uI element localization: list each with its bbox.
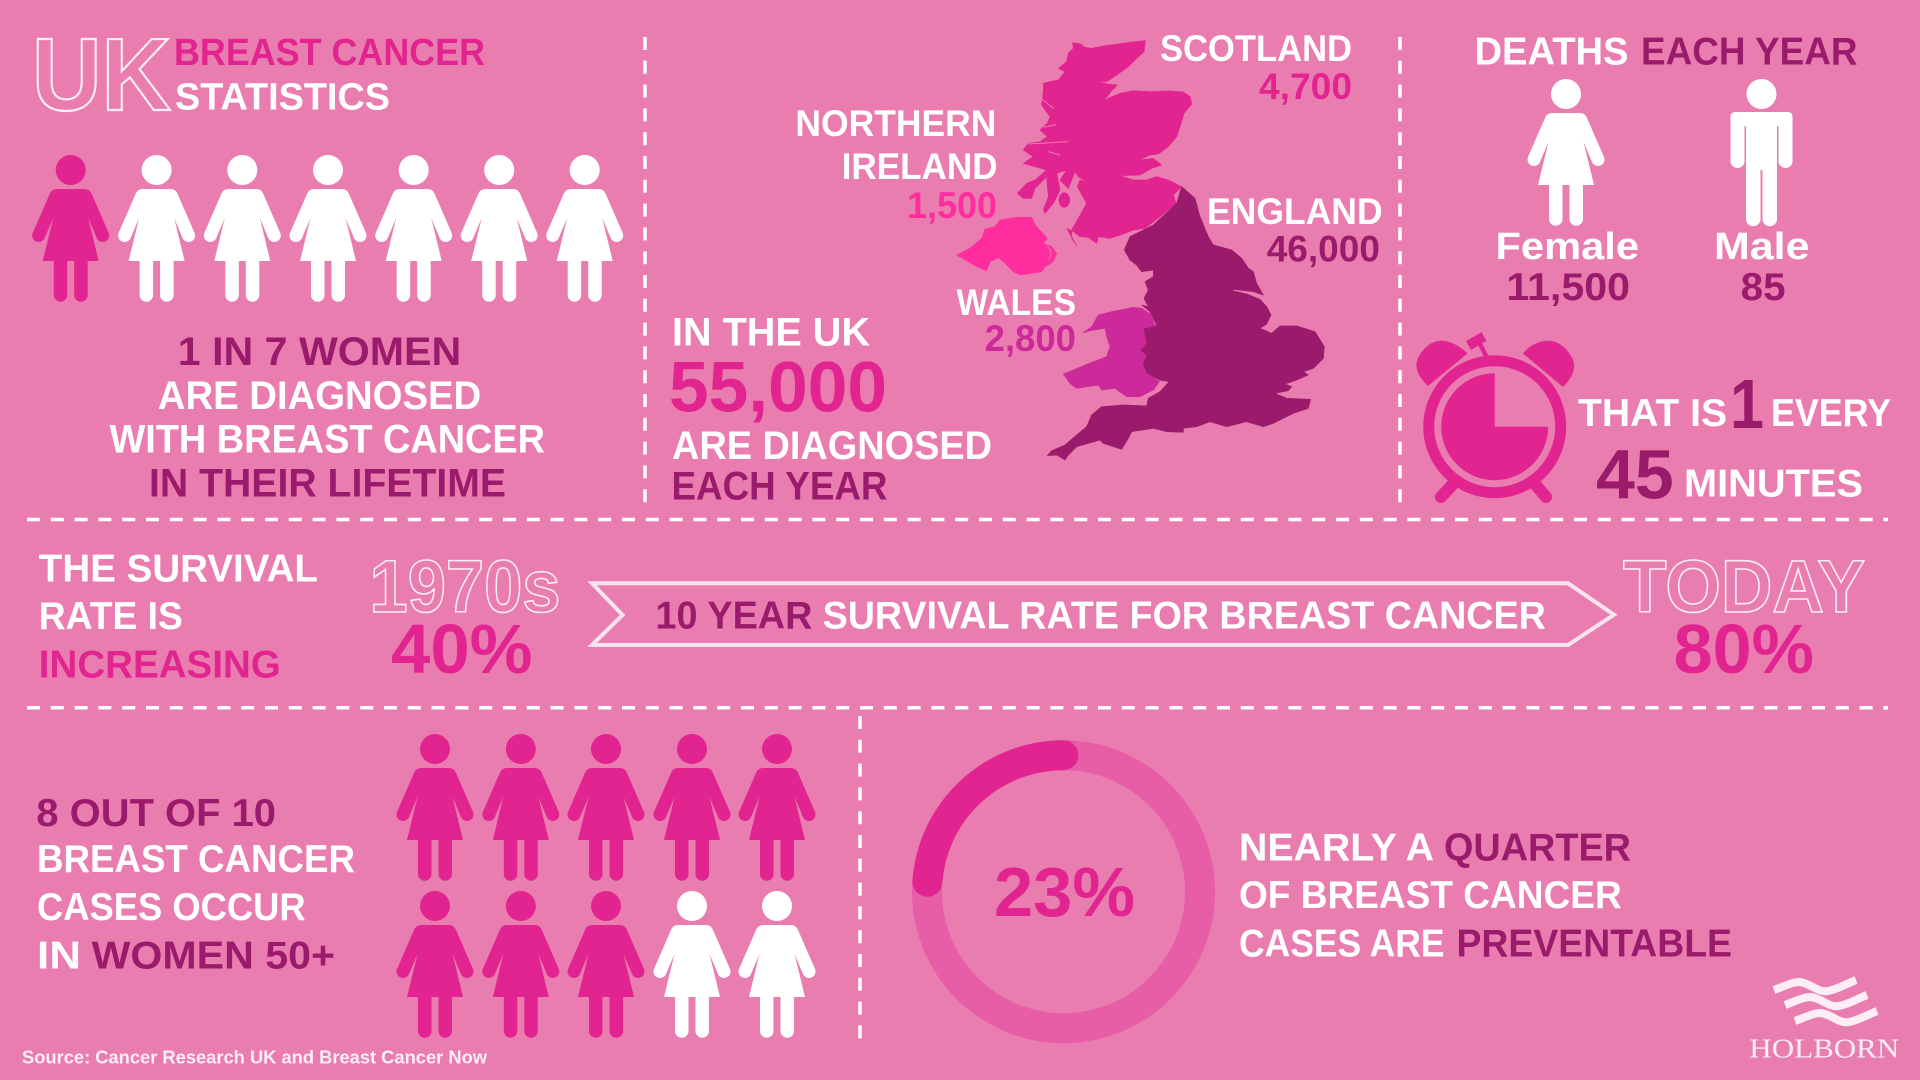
text: nearly a quarter preventable: NEARLY A <box>1239 827 1434 870</box>
label: Scotland: 4,700 <box>1259 66 1352 107</box>
icon: female <box>1528 79 1604 226</box>
map: England <box>1047 187 1324 460</box>
text: 8 out of 10: IN <box>37 934 81 978</box>
pictogram: 8 out of 10 women <box>396 734 816 1038</box>
text: nearly a quarter preventable: QUARTER <box>1444 827 1631 870</box>
text: 55,000 diagnosed each year: IN THE UK <box>672 311 870 355</box>
stat: male deaths <box>1714 226 1810 309</box>
text: 1 in 7 women diagnosed: ARE DIAGNOSED <box>158 374 481 418</box>
title <box>32 17 485 132</box>
stat: 1970s 40% <box>370 545 560 688</box>
text: that is 1 every 45 minutes: THAT IS <box>1578 392 1727 435</box>
heading: deaths each year: EACH YEAR <box>1641 30 1858 73</box>
stat: female deaths: Female <box>1496 226 1639 268</box>
stat: today 80%: 80% <box>1674 610 1814 688</box>
label: Scotland: SCOTLAND <box>1160 28 1352 69</box>
stat: male deaths: Male <box>1714 226 1810 268</box>
text: 1 in 7 women diagnosed <box>110 330 545 506</box>
label: Northern Ireland: NORTHERN <box>795 103 996 144</box>
text: 8 out of 10: CASES OCCUR <box>37 886 306 929</box>
map: Wales <box>1063 307 1159 397</box>
icon: male <box>1730 79 1792 226</box>
text: 8 out of 10: 8 OUT OF 10 <box>36 792 276 835</box>
text: 8 out of 10: BREAST CANCER <box>37 838 355 881</box>
pictogram: 1 in 7 women <box>32 155 623 302</box>
label: Wales: WALES <box>956 282 1076 323</box>
heading: deaths each year <box>1474 30 1858 73</box>
text: nearly a quarter preventable: OF BREAST CANCER <box>1239 874 1622 917</box>
title: BREAST CANCER <box>174 32 485 74</box>
text: 55,000 diagnosed each year: EACH YEAR <box>672 464 888 508</box>
label: Wales: 2,800 <box>985 318 1076 359</box>
title: UK <box>32 17 171 132</box>
text: nearly a quarter preventable <box>1239 827 1732 965</box>
label: Northern Ireland: IRELAND <box>842 146 998 187</box>
text: 55,000 diagnosed each year: ARE DIAGNOSED <box>672 424 992 468</box>
text: 8 out of 10 <box>36 792 355 978</box>
arrow banner: 10 year survival rate <box>592 583 1614 645</box>
stat: today 80%: TODAY <box>1623 545 1865 628</box>
text: that is 1 every 45 minutes <box>1578 365 1891 513</box>
text: that is 1 every 45 minutes: 45 <box>1596 435 1674 513</box>
label: England <box>1207 191 1383 270</box>
text: 8 out of 10: WOMEN 50+ <box>92 934 335 978</box>
label: Scotland <box>1160 28 1352 107</box>
text: that is 1 every 45 minutes: MINUTES <box>1684 463 1863 506</box>
donut chart: 23%: 23% <box>994 853 1135 931</box>
text: that is 1 every 45 minutes: EVERY <box>1771 392 1891 435</box>
icon: alarm clock <box>1416 336 1574 497</box>
text: 1 in 7 women diagnosed: WITH BREAST CANCER <box>110 418 545 462</box>
donut chart: 23% <box>927 755 1200 1028</box>
label: England: ENGLAND <box>1207 191 1383 232</box>
map: Scotland <box>1017 41 1192 246</box>
text: 1 in 7 women diagnosed: IN THEIR LIFETIME <box>149 462 506 506</box>
arrow banner: 10 year survival rate: SURVIVAL RATE FOR BREAST CANCER <box>823 594 1546 638</box>
stat: 1970s 40%: 40% <box>391 610 532 688</box>
map: Northern Ireland <box>957 217 1057 275</box>
stat: male deaths: 85 <box>1741 266 1786 309</box>
heading: deaths each year: DEATHS <box>1474 30 1628 73</box>
stat: today 80% <box>1623 545 1865 688</box>
stat: female deaths: 11,500 <box>1506 266 1630 309</box>
text: survival rate is increasing: RATE IS <box>39 595 183 638</box>
label: Northern Ireland: 1,500 <box>907 185 997 226</box>
logo: Holborn: HOLBORN <box>1749 1033 1899 1063</box>
text: that is 1 every 45 minutes: 1 <box>1730 365 1764 443</box>
text: 1 in 7 women diagnosed: 1 IN 7 WOMEN <box>178 330 461 374</box>
text: nearly a quarter preventable: PREVENTABLE <box>1456 922 1732 965</box>
text: 55,000 diagnosed each year <box>669 311 992 508</box>
text: survival rate is increasing: THE SURVIVAL <box>39 547 318 590</box>
label: Northern Ireland <box>795 103 998 226</box>
stat: 1970s 40%: 1970s <box>370 545 560 628</box>
stat: female deaths <box>1496 226 1639 309</box>
text: 55,000 diagnosed each year: 55,000 <box>669 349 887 428</box>
source note: Source: Cancer Research UK and Breast Cancer Now <box>22 1048 488 1068</box>
label: England: 46,000 <box>1267 229 1380 270</box>
logo: Holborn <box>1749 980 1899 1063</box>
map of the UK <box>957 41 1324 460</box>
arrow banner: 10 year survival rate: 10 YEAR <box>656 594 812 638</box>
text: nearly a quarter preventable: CASES ARE <box>1239 922 1444 965</box>
label: Wales <box>956 282 1076 359</box>
text: survival rate is increasing <box>39 547 318 686</box>
text: survival rate is increasing: INCREASING <box>39 643 281 686</box>
title: STATISTICS <box>175 76 390 118</box>
